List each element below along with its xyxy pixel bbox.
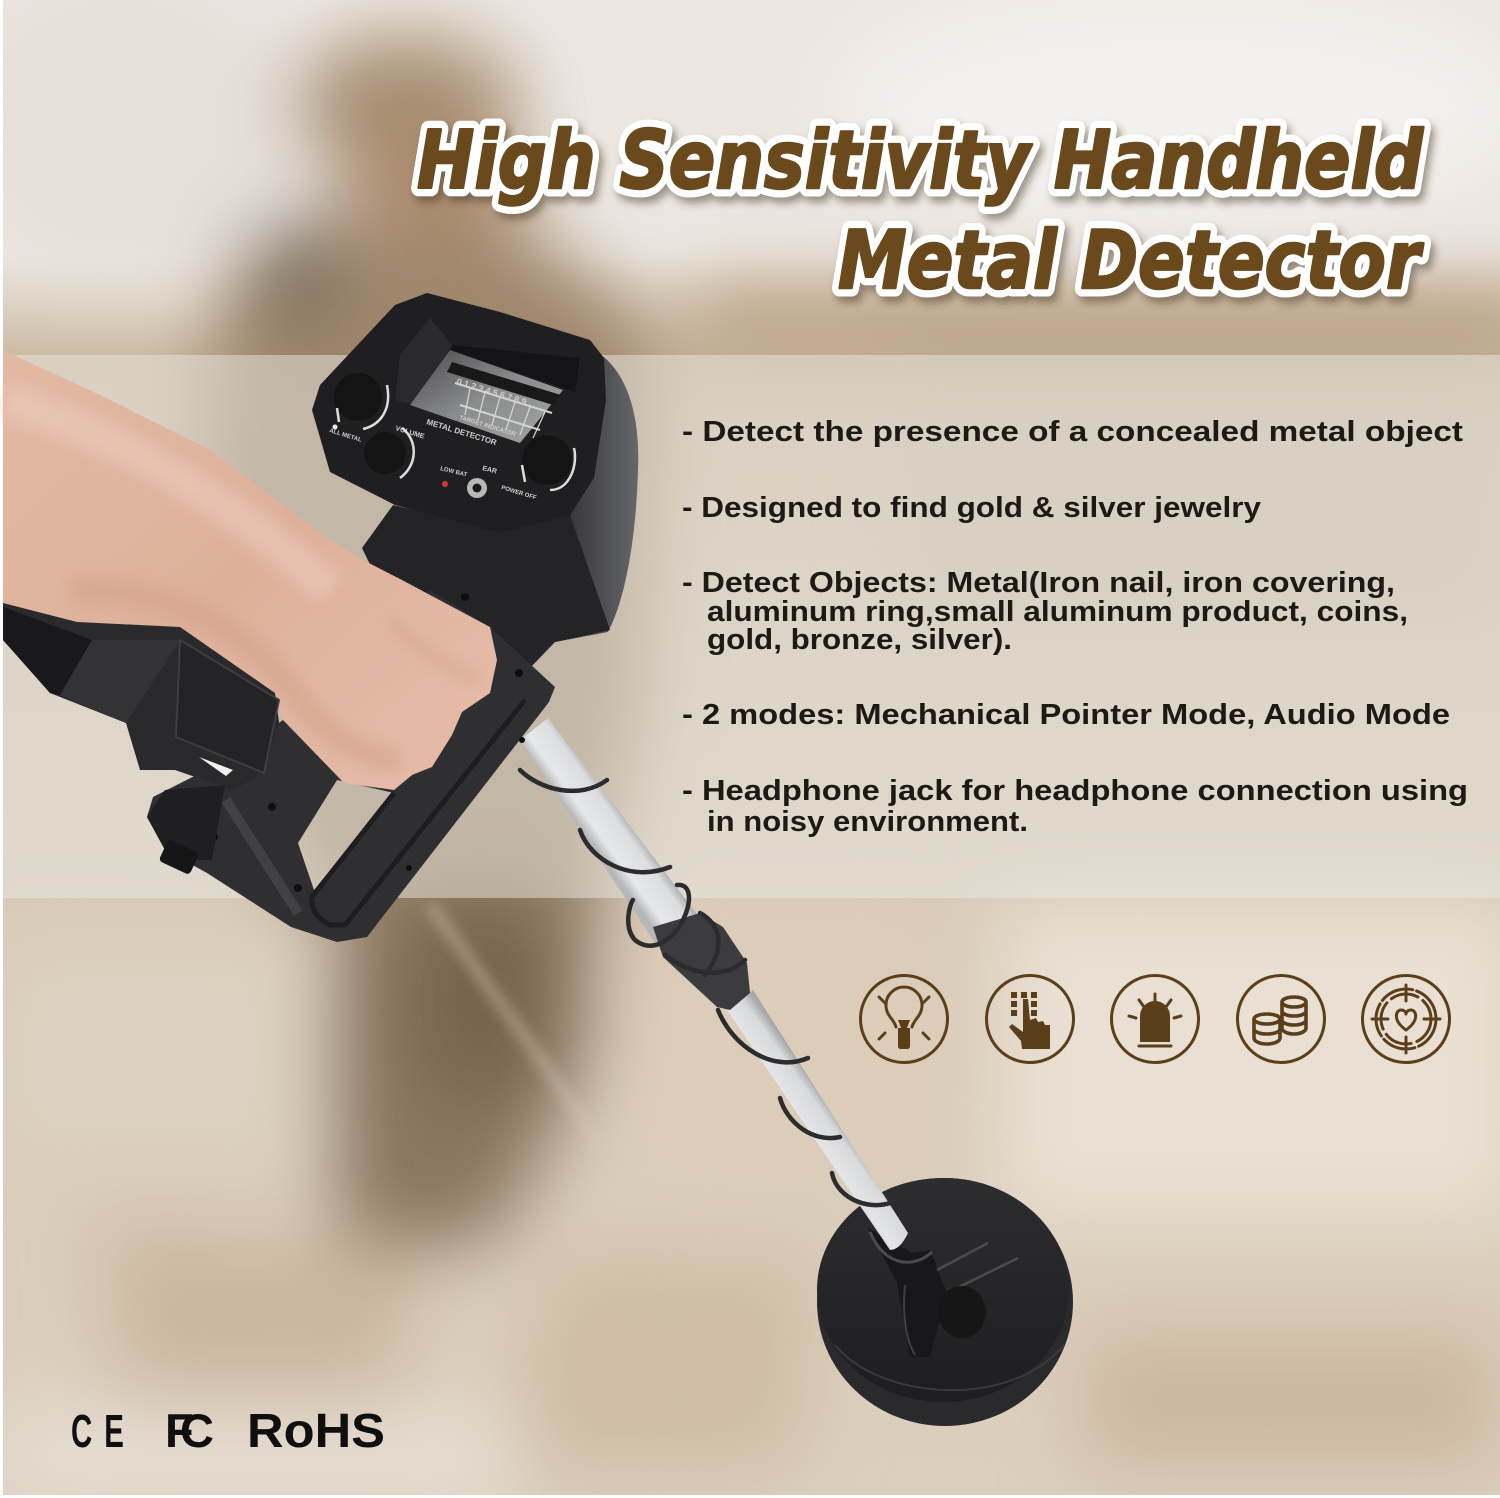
feature: detect concealed metal: - Detect the presence of a concealed metal object <box>682 416 1463 448</box>
control box faceplate: ALL METAL <box>328 428 362 444</box>
control box faceplate <box>312 293 606 533</box>
connector under control box <box>362 505 610 668</box>
cuff clamp and thumb screw <box>147 785 225 860</box>
CE mark: E <box>104 1407 124 1458</box>
icon: target with heart <box>1362 976 1450 1062</box>
FCC mark: C <box>180 1404 214 1457</box>
title <box>417 114 1424 307</box>
title: Metal Detector <box>838 214 1424 307</box>
meter hood <box>395 318 452 404</box>
forearm and hand <box>3 350 497 790</box>
control box faceplate: VOLUME <box>394 425 425 441</box>
icon: light bulb <box>860 976 948 1062</box>
panel: translucent feature band <box>0 355 1500 898</box>
control box faceplate: LOW BAT <box>440 466 468 479</box>
cuff clip highlight <box>199 757 233 776</box>
icon: finger pressing keypad <box>986 976 1074 1062</box>
control box faceplate: POWER OFF <box>500 485 537 502</box>
feature: headphone jack <box>682 775 1468 838</box>
knob: volume <box>364 428 414 478</box>
arm cuff <box>3 603 279 875</box>
feature: headphone jack: - Headphone jack for headphone connection using <box>682 775 1468 807</box>
icon: alarm beacon <box>1112 976 1198 1062</box>
knob: all metal <box>332 373 388 430</box>
search coil <box>817 1178 1073 1426</box>
shaft: upper silver tube <box>520 718 705 950</box>
CE mark: C <box>71 1407 92 1458</box>
feature: detectable objects <box>682 567 1408 656</box>
shaft: lower silver tube <box>727 990 908 1250</box>
feature: detectable objects: - Detect Objects: Metal(Iron nail, iron covering, <box>682 567 1395 599</box>
analogue meter <box>410 350 563 443</box>
feature: detectable objects: aluminum ring,small aluminum product, coins, <box>707 596 1408 628</box>
coil tilt knob <box>938 1286 986 1338</box>
handle highlights and screw holes <box>210 593 525 925</box>
feature: gold and silver: - Designed to find gold & silver jewelry <box>682 492 1261 524</box>
control box faceplate: EAR <box>482 465 498 476</box>
spiral cable <box>520 770 897 1205</box>
feature list <box>682 416 1468 838</box>
shaft clamp <box>653 913 750 1010</box>
knob: power <box>522 435 575 490</box>
feature: two modes: - 2 modes: Mechanical Pointer Mode, Audio Mode <box>682 699 1450 731</box>
handle frame <box>147 590 555 942</box>
analogue meter: 0 1 2 3 4 5 6 7 8 9 <box>455 376 528 407</box>
title: Metal Detector <box>838 214 1424 307</box>
coil yoke <box>868 1228 947 1357</box>
certification marks <box>71 1404 385 1458</box>
FCC mark: F <box>165 1404 194 1457</box>
RoHS mark: RoHS <box>247 1405 385 1458</box>
feature: headphone jack: in noisy environment. <box>707 806 1028 838</box>
analogue meter: TARGET INDICATOR <box>458 415 517 438</box>
control box side body <box>470 357 638 642</box>
icon row <box>860 976 1450 1062</box>
product: metal detector held in hand <box>3 293 1073 1426</box>
low battery LED <box>442 481 448 487</box>
icon: stacked coins <box>1238 976 1324 1062</box>
earphone jack <box>467 478 487 498</box>
feature: detectable objects: gold, bronze, silver). <box>707 624 1012 656</box>
faceplate labels: METAL DETECTOR <box>425 417 498 447</box>
